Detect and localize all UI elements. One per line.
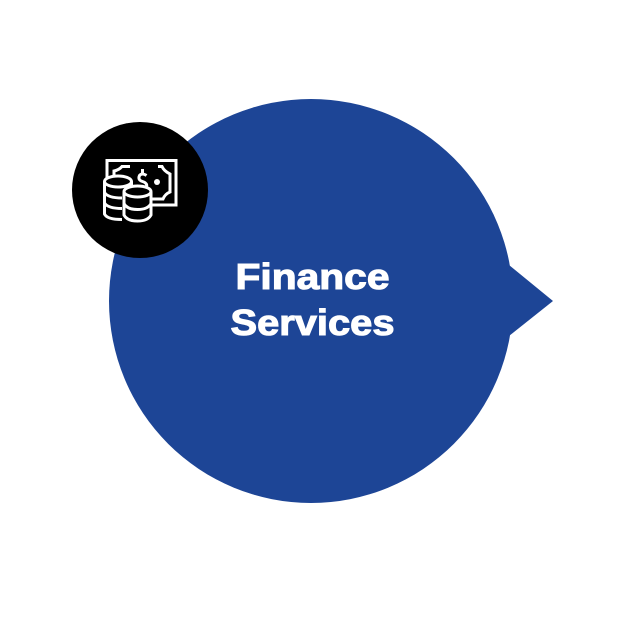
heading: Finance Services: Finance — [236, 256, 390, 297]
icon badge: banknote and coins — [72, 122, 208, 258]
icon: right coin stack — [124, 186, 151, 221]
icon: left coin stack — [104, 176, 132, 220]
speech bubble panel — [109, 99, 553, 503]
heading: Finance Services: Services — [230, 302, 394, 343]
icon: banknote — [107, 160, 176, 205]
heading: Finance Services — [230, 256, 394, 343]
